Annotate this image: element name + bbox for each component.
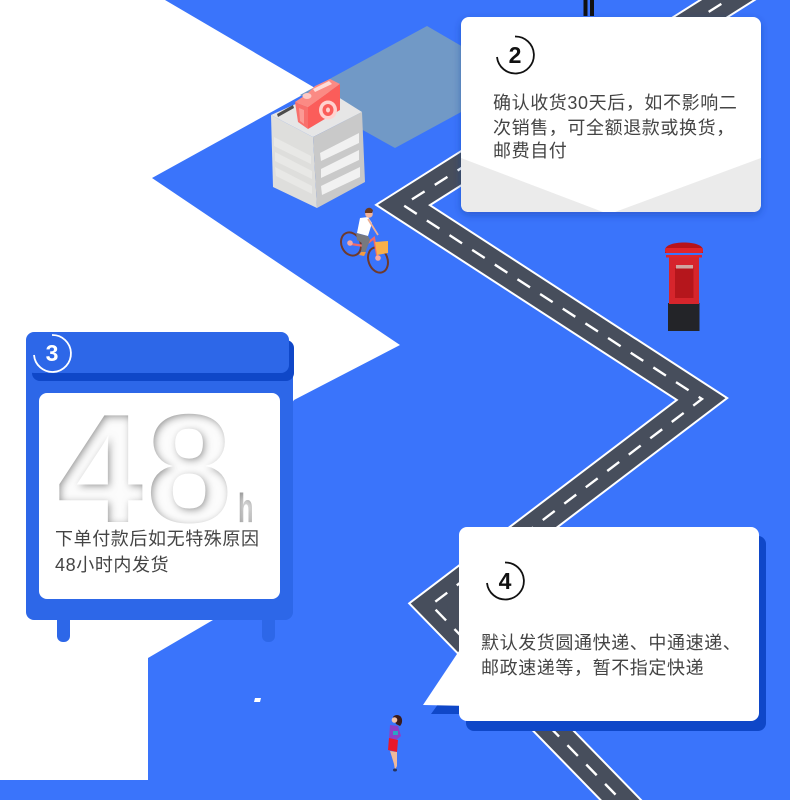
- card 2 text: [493, 93, 737, 161]
- card 4 text: 邮政速递等，暂不指定快递: [481, 658, 704, 678]
- building: [271, 90, 365, 208]
- card 2: [461, 17, 761, 212]
- card 2 text: 确认收货30天后，如不影响二: [493, 93, 737, 113]
- card 3 text: 下单付款后如无特殊原因: [55, 529, 260, 549]
- number badge 4: [487, 562, 524, 599]
- card background: [461, 17, 761, 212]
- icon: building with camera: [271, 79, 365, 208]
- header: [26, 332, 289, 373]
- plaza parallelogram: [300, 26, 520, 148]
- card 2 text: 邮费自付: [493, 141, 567, 161]
- card shadow: [466, 536, 766, 731]
- white panel: [39, 393, 280, 599]
- number badge 4: 4: [499, 568, 512, 594]
- card 4 text: 默认发货圆通快递、中通速递、: [481, 633, 741, 653]
- embossed 48h: 8: [146, 382, 232, 555]
- envelope flaps: [461, 158, 761, 212]
- board: [26, 345, 293, 620]
- card 4: [423, 527, 766, 731]
- number badge 3: 3: [46, 340, 58, 366]
- winding road: [403, 0, 767, 800]
- pole at top: [584, 0, 594, 16]
- card 3 text: [55, 529, 260, 575]
- icon: woman: [388, 715, 402, 772]
- card 2 text: 次销售，可全额退款或换货，: [493, 118, 735, 138]
- number badge 2: [497, 36, 534, 73]
- speech tail: [423, 651, 470, 706]
- card 4 text: [481, 633, 741, 678]
- small white mark: [254, 698, 261, 702]
- icon: red post box: [665, 242, 703, 331]
- card background: [459, 527, 759, 721]
- embossed 48h: h: [238, 486, 254, 532]
- number badge 3: [34, 335, 71, 372]
- embossed 48h: [57, 382, 254, 555]
- card 3: [26, 332, 294, 642]
- header shadow: [32, 340, 294, 381]
- tail shadow: [431, 660, 470, 714]
- number badge 2: 2: [509, 42, 521, 68]
- embossed 48h: 4: [57, 382, 143, 555]
- camera: [295, 79, 340, 129]
- icon: cyclist: [337, 208, 391, 275]
- white background shape: [0, 0, 400, 780]
- card 3 text: 48小时内发货: [55, 555, 169, 575]
- legs: [57, 610, 275, 642]
